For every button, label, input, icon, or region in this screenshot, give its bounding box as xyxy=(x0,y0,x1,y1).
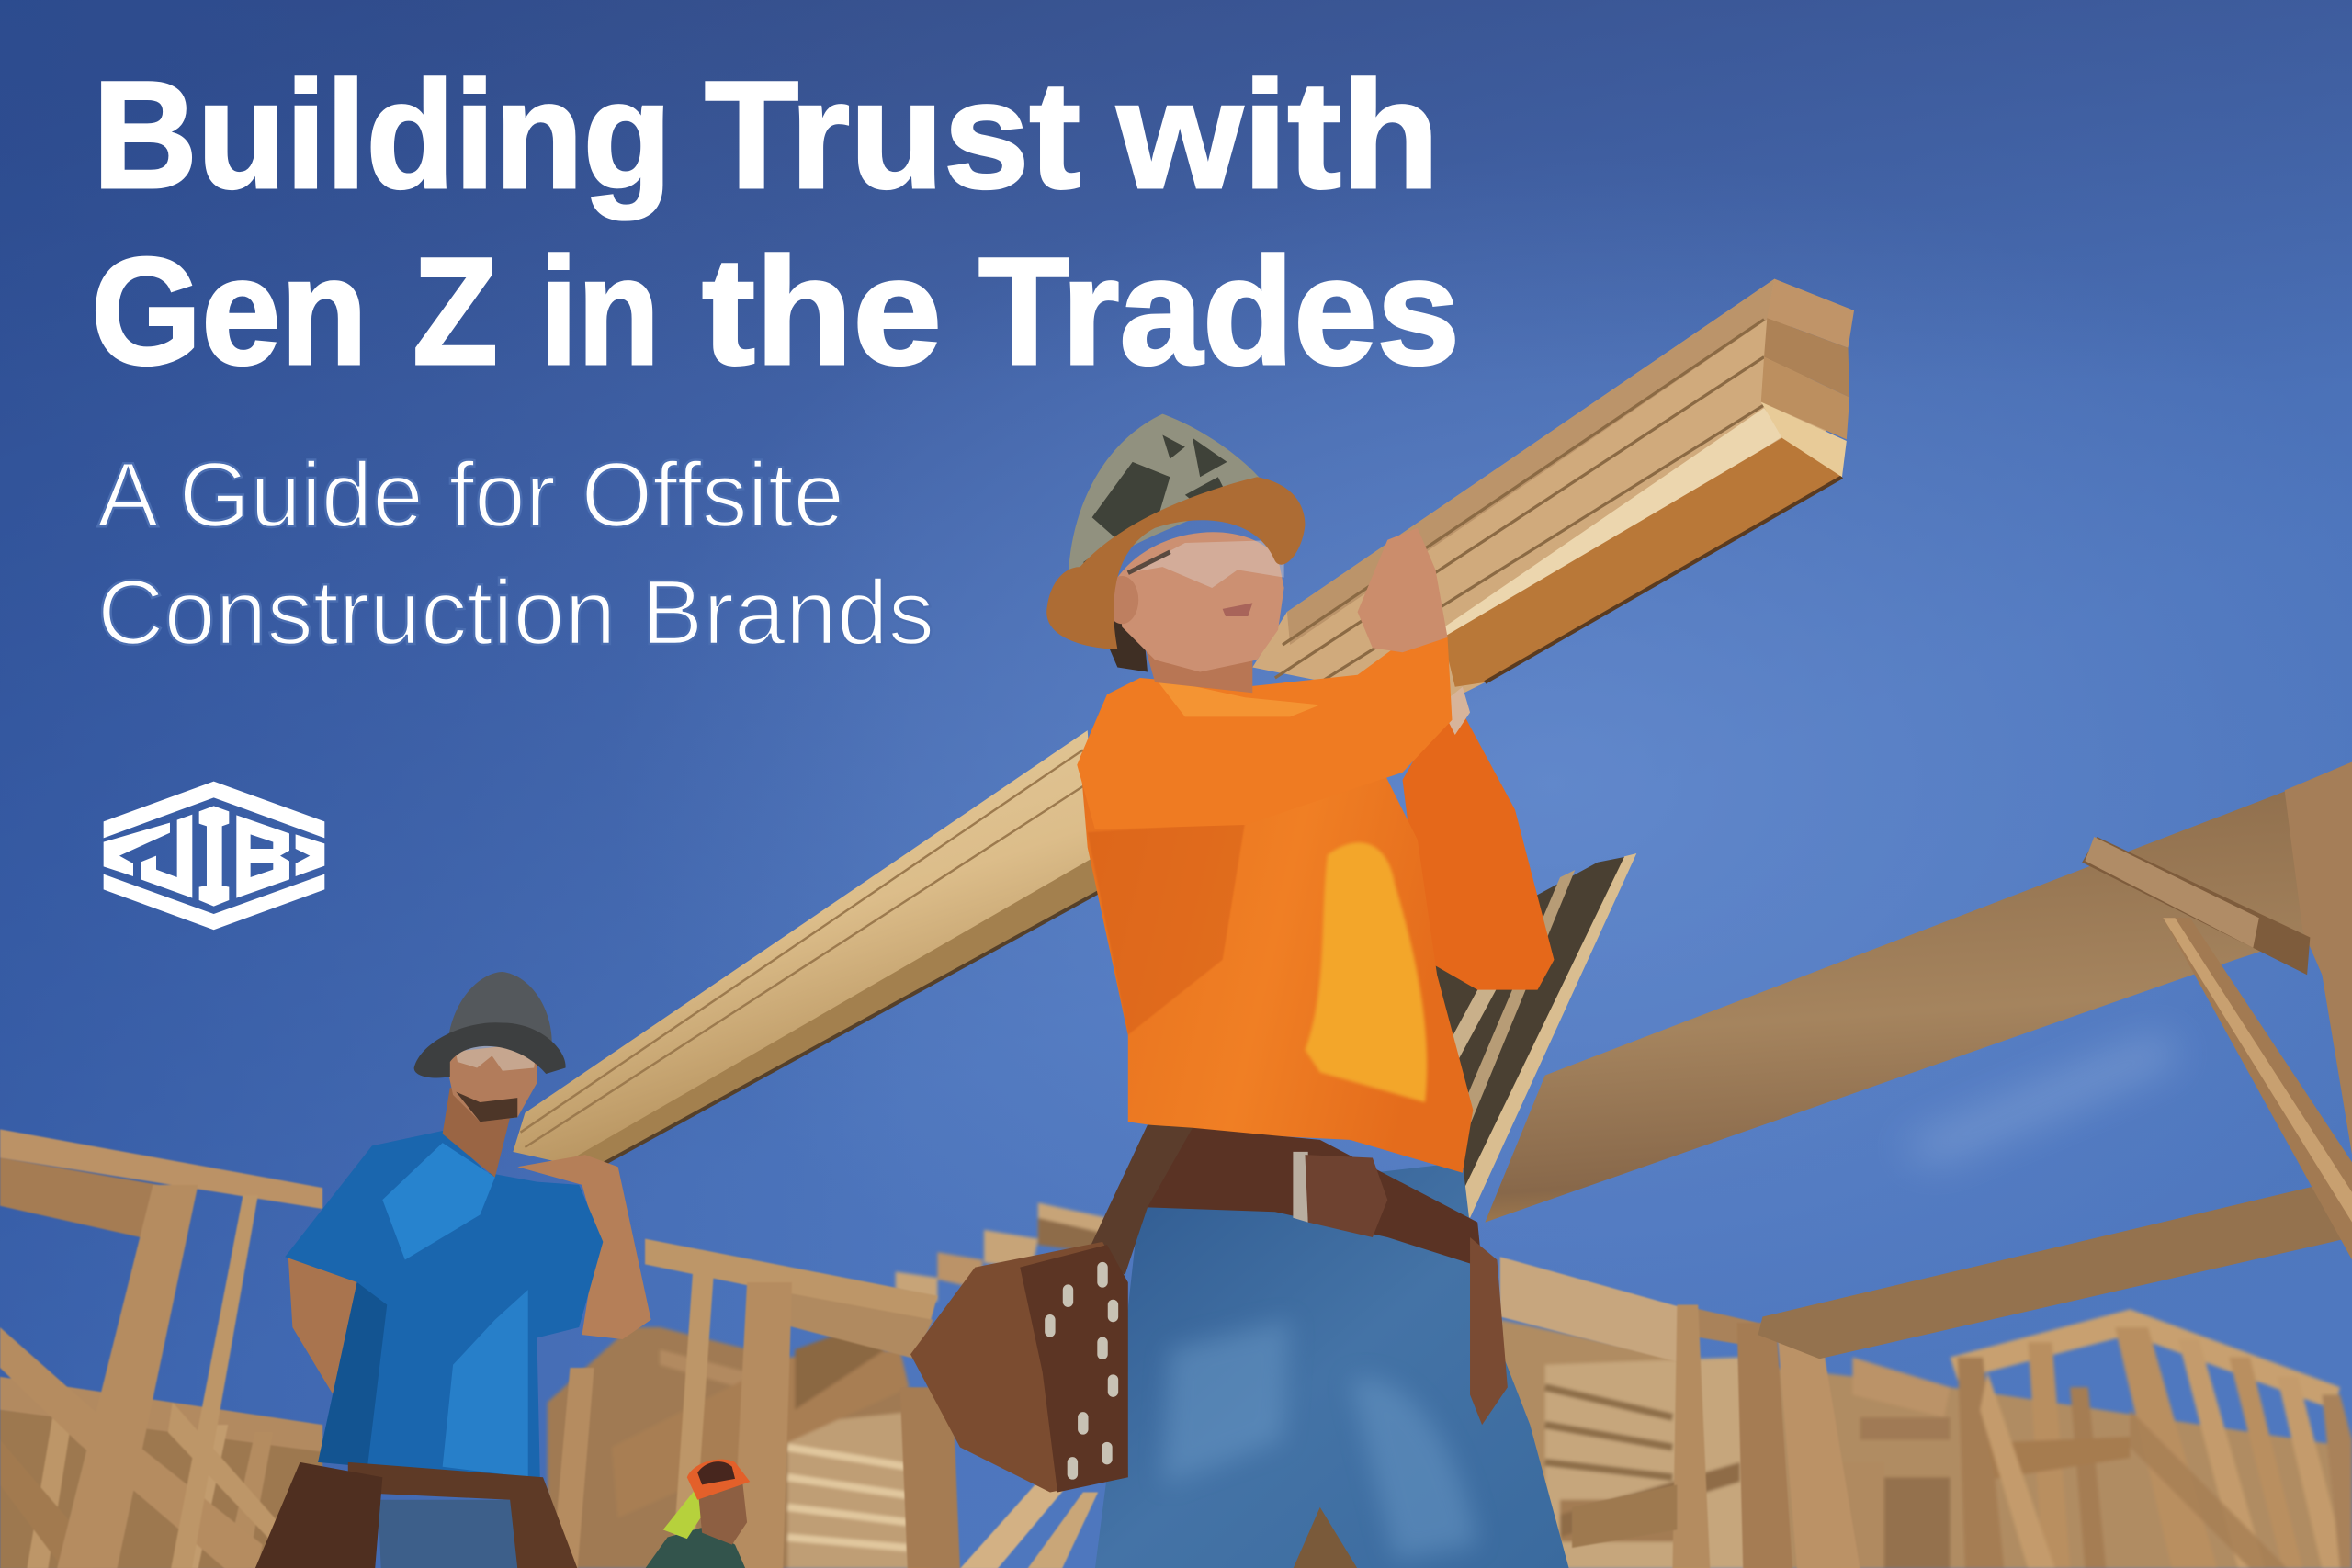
lumber: left section xyxy=(513,730,1098,1170)
third worker in background xyxy=(645,1460,750,1568)
lumber: right section side xyxy=(1252,279,1842,705)
lumber: orange underside xyxy=(1443,438,1842,687)
ear xyxy=(1105,576,1138,624)
face xyxy=(1117,532,1284,671)
near timber framing, right: corner posts xyxy=(1500,1257,1860,1568)
shirt sunlit patch xyxy=(1305,842,1427,1102)
hard hat brim xyxy=(1046,477,1305,649)
hanging belt end xyxy=(1470,1237,1508,1425)
lumber: left section underside xyxy=(558,855,1098,1170)
jeans xyxy=(1095,1162,1569,1568)
title: Gen xyxy=(91,227,368,397)
timber frame and stairs between workers xyxy=(548,1202,1107,1568)
title: the xyxy=(702,227,942,397)
glasses arm xyxy=(1128,552,1170,573)
far arm and hand xyxy=(517,1155,651,1339)
safety glasses xyxy=(455,1045,537,1071)
lumber: lit plank xyxy=(1440,408,1785,648)
tool pouch xyxy=(910,1242,1128,1493)
orange shirt torso xyxy=(1080,678,1473,1173)
title xyxy=(91,51,1460,397)
title: Z xyxy=(413,227,498,397)
denim highlights xyxy=(1162,1320,1477,1560)
shoulder strap xyxy=(1088,1125,1193,1275)
safety glasses xyxy=(1128,540,1284,588)
timber frame, left xyxy=(0,1129,322,1568)
lips xyxy=(1223,603,1252,616)
lumber stack carried by workers xyxy=(513,279,1854,1170)
gap between legs xyxy=(1293,1507,1358,1568)
timber post and braces, far right xyxy=(2082,761,2352,1259)
beard xyxy=(456,1092,517,1122)
lower crossbeam, right xyxy=(1758,1178,2352,1359)
woman in orange shirt xyxy=(910,414,1569,1568)
man in blue t-shirt xyxy=(255,972,651,1568)
hard hat brim xyxy=(414,1022,566,1078)
belt buckle xyxy=(1293,1152,1308,1223)
lumber: upper plank shading xyxy=(1287,279,1774,645)
front sleeve xyxy=(1077,637,1452,829)
subtitle xyxy=(97,444,934,664)
hands on lumber xyxy=(1358,528,1448,652)
title: Building xyxy=(93,51,672,220)
rear hand xyxy=(1440,687,1470,735)
logo: JIB xyxy=(104,782,324,930)
face xyxy=(444,1043,537,1122)
title: Trades xyxy=(978,227,1460,397)
neck xyxy=(1140,630,1252,693)
neck xyxy=(443,1088,510,1178)
big overhead beam, right xyxy=(1485,790,2318,1223)
shirt shadows xyxy=(1088,822,1245,1035)
title: Trust xyxy=(705,51,1080,220)
hard hat camo spots xyxy=(1083,434,1227,567)
plywood sheets behind worker xyxy=(1418,853,1636,1218)
tool belt xyxy=(348,1462,578,1568)
hair xyxy=(1095,592,1148,671)
near arm xyxy=(288,1252,435,1451)
subtitle: A Guide for Offsite xyxy=(97,444,844,547)
timber frame uprights between workers xyxy=(552,1239,1098,1568)
far timber framing, right xyxy=(1500,1309,2352,1568)
hard hat xyxy=(447,972,552,1050)
title: with xyxy=(1116,51,1440,220)
title: in xyxy=(540,227,660,397)
rear arm xyxy=(1403,713,1554,990)
hard hat camo dome xyxy=(1068,414,1268,588)
cloud wisp xyxy=(1897,1035,2183,1162)
jeans xyxy=(378,1500,537,1568)
lumber: end grain xyxy=(1761,279,1854,477)
lumber: plank seams xyxy=(1275,320,1764,682)
subtitle: Construction Brands xyxy=(97,561,934,664)
leather belt xyxy=(1148,1128,1482,1268)
blue shirt xyxy=(285,1131,603,1479)
